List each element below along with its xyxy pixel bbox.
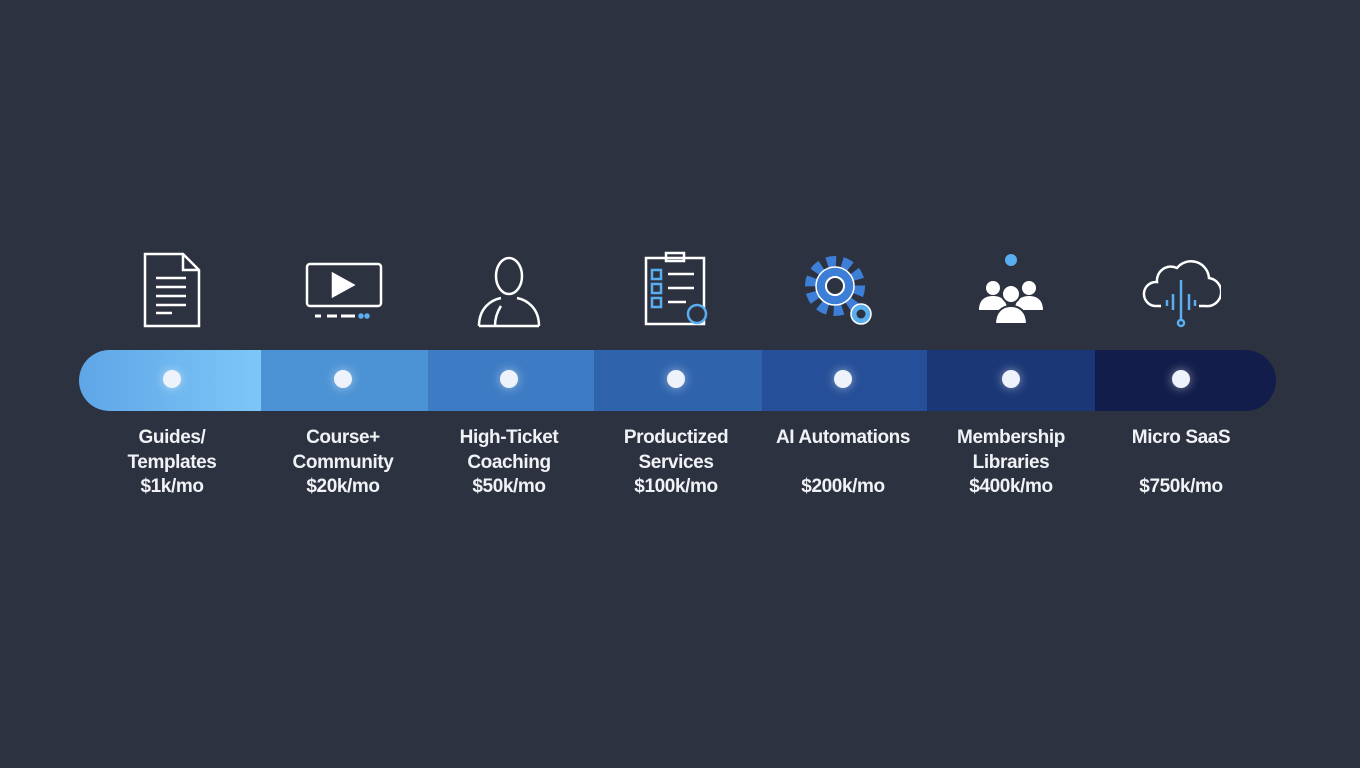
icon: person <box>478 256 540 328</box>
label 5 <box>776 427 910 497</box>
icon: group <box>979 254 1043 323</box>
label 4: Services <box>638 452 713 472</box>
label 1: $1k/mo <box>140 476 204 497</box>
dot 7 <box>1172 370 1190 388</box>
label 6: Libraries <box>973 452 1049 472</box>
label 6: Membership <box>957 427 1065 448</box>
label 1: Guides/ <box>139 427 205 448</box>
label 1: Templates <box>128 452 216 472</box>
label 5: $200k/mo <box>801 476 885 497</box>
label 4 <box>624 427 728 497</box>
label 2: Community <box>293 452 393 472</box>
label 4: $100k/mo <box>634 476 718 497</box>
label 4: Productized <box>624 427 728 448</box>
label 2: $20k/mo <box>306 476 380 497</box>
dot 3 <box>500 370 518 388</box>
label 3: $50k/mo <box>472 476 546 497</box>
dot 5 <box>834 370 852 388</box>
label 3: Coaching <box>467 452 551 472</box>
label 2 <box>293 427 394 497</box>
label 1 <box>128 427 216 497</box>
label 2: Course+ <box>306 427 380 448</box>
dot 4 <box>667 370 685 388</box>
icon: document <box>144 252 200 328</box>
label 6: $400k/mo <box>969 476 1053 497</box>
dot 1 <box>163 370 181 388</box>
label 7: $750k/mo <box>1139 476 1223 497</box>
icon: checklist <box>644 252 708 326</box>
icon: gears <box>805 256 872 325</box>
label 6 <box>957 427 1065 497</box>
timeline bar <box>79 350 1276 411</box>
label 3: High-Ticket <box>460 427 558 448</box>
label 7 <box>1132 427 1230 497</box>
dot 2 <box>334 370 352 388</box>
label 3 <box>460 427 558 497</box>
label 5: AI Automations <box>776 427 910 448</box>
icon: video <box>306 262 382 319</box>
icon: cloud <box>1142 260 1221 328</box>
dot 6 <box>1002 370 1020 388</box>
label 7: Micro SaaS <box>1132 427 1230 448</box>
